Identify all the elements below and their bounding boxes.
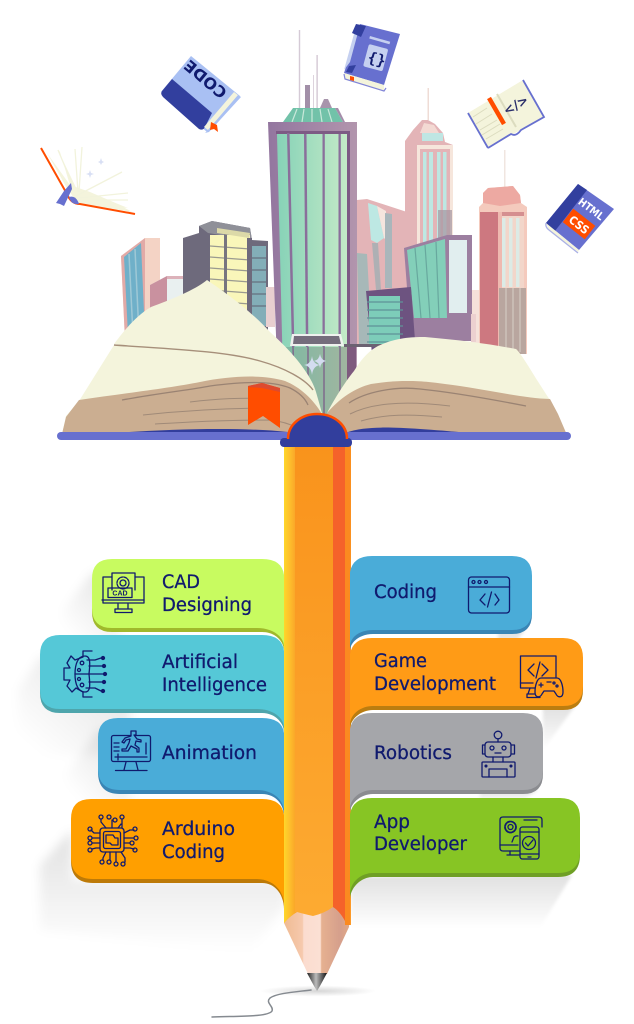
text: Game Development: Development bbox=[374, 674, 496, 695]
text: Arduino Coding: Coding bbox=[162, 842, 225, 863]
pencil drawn line bbox=[212, 990, 311, 1017]
icon: CAD monitor bbox=[102, 573, 144, 612]
text: App Developer: Developer bbox=[374, 834, 467, 855]
pencil wood tip bbox=[284, 905, 350, 974]
floating book: HTML CSS bbox=[546, 184, 614, 253]
text: Artificial Intelligence bbox=[162, 652, 267, 696]
panel: Coding bbox=[350, 556, 532, 651]
text: App Developer bbox=[374, 812, 467, 855]
building: teal front tower bbox=[404, 235, 476, 342]
panel: CAD Designing bbox=[92, 559, 284, 651]
building: dark office block bbox=[183, 221, 275, 330]
floating book: CODE bbox=[161, 56, 241, 133]
text: Arduino Coding bbox=[162, 819, 235, 863]
text: CAD Designing: CAD bbox=[162, 572, 200, 593]
floating book: curly braces bbox=[344, 24, 400, 91]
icon: animation monitor bbox=[112, 731, 150, 770]
text: CAD Designing: Designing bbox=[162, 595, 252, 616]
pencil lead bbox=[307, 973, 327, 991]
panel: Robotics bbox=[350, 713, 543, 813]
panel: Animation bbox=[98, 718, 284, 816]
building: dark front block bbox=[366, 287, 416, 354]
icon: game monitor and controller bbox=[520, 656, 563, 698]
text: CAD Designing bbox=[162, 572, 252, 616]
text: Arduino Coding: Arduino bbox=[162, 819, 235, 840]
text: Game Development bbox=[374, 651, 496, 695]
book cover bbox=[57, 428, 571, 447]
building: pink spire tower bbox=[405, 88, 453, 260]
pencil bbox=[212, 445, 376, 1017]
left pages bbox=[62, 280, 322, 437]
text: Artificial Intelligence: Intelligence bbox=[162, 675, 267, 696]
book spine bbox=[288, 414, 347, 443]
street lamp bbox=[290, 334, 384, 347]
panel: App Developer bbox=[350, 798, 580, 899]
text: Artificial Intelligence: Artificial bbox=[162, 652, 238, 673]
right pages bbox=[327, 337, 567, 437]
large open book bbox=[57, 280, 571, 447]
building: far left pink tower bbox=[121, 238, 160, 340]
panel: Game Development bbox=[350, 638, 583, 729]
floating book: open code book bbox=[468, 80, 544, 148]
building: central glass skyscraper bbox=[268, 30, 357, 416]
icon: browser code window bbox=[468, 577, 510, 613]
pencil shadow on ground bbox=[260, 986, 376, 996]
sparkle stars bbox=[304, 354, 326, 375]
pencil body bbox=[284, 445, 351, 925]
floating book: open code book: </> bbox=[501, 93, 531, 119]
floating book: CODE: CODE bbox=[181, 56, 231, 102]
floating book: open left book bbox=[41, 147, 135, 214]
icon: robot bbox=[482, 731, 515, 777]
text: App Developer: App bbox=[374, 812, 410, 833]
icon: Arduino chip bbox=[88, 815, 138, 866]
text: Animation: Animation bbox=[162, 743, 257, 764]
city skyline bbox=[121, 30, 527, 416]
turning page bbox=[114, 280, 322, 413]
text: Game Development: Game bbox=[374, 651, 427, 672]
panel shadows bbox=[18, 573, 575, 952]
icon: CAD monitor: CAD bbox=[112, 590, 128, 598]
icon: app developer devices bbox=[500, 817, 542, 859]
text: Robotics: Robotics bbox=[374, 743, 452, 764]
floating book: curly braces: {} bbox=[366, 48, 388, 70]
building: coral tower bbox=[472, 150, 527, 354]
floating book: HTML CSS: CSS bbox=[566, 213, 592, 237]
panel: Arduino Coding bbox=[71, 799, 284, 909]
bookmark bbox=[248, 383, 280, 428]
text: Coding: Coding bbox=[374, 582, 437, 603]
building: small pink block bbox=[150, 276, 187, 330]
floating book: HTML CSS: HTML bbox=[576, 196, 606, 223]
building: pink midground block bbox=[357, 199, 440, 345]
icon: AI gear brain bbox=[64, 651, 106, 697]
panel: Artificial Intelligence bbox=[40, 635, 284, 732]
